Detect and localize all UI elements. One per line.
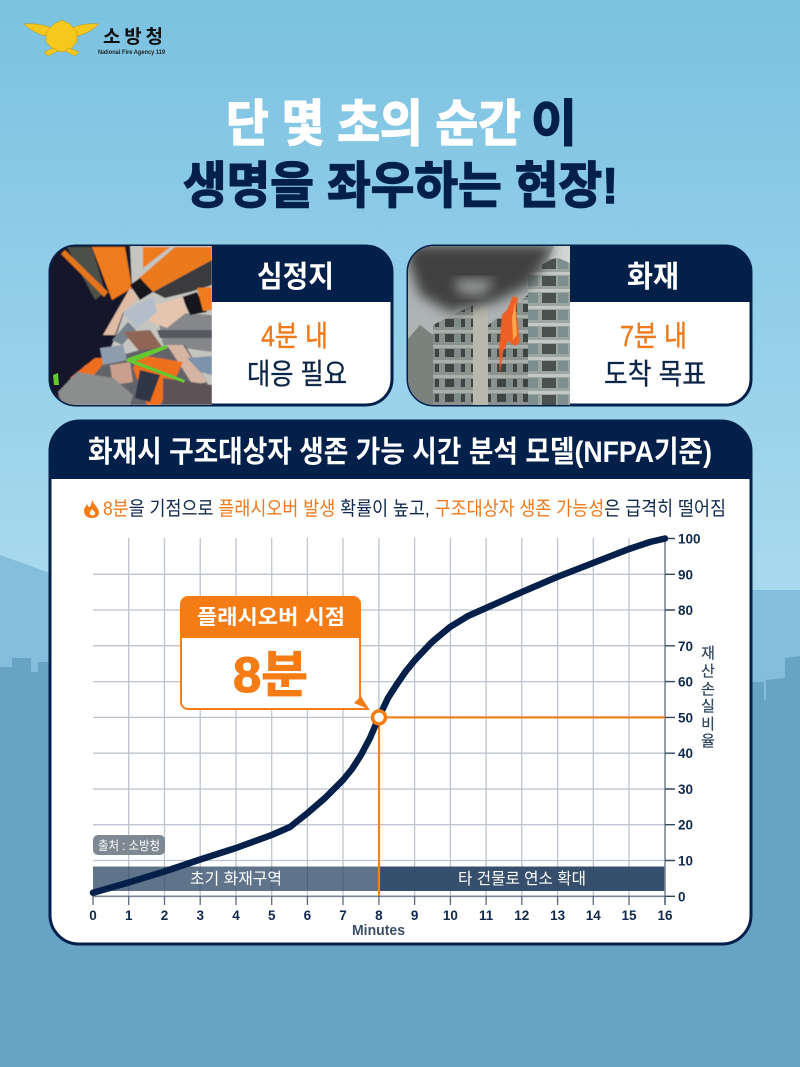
x axis labels: 6 bbox=[304, 908, 312, 923]
title: 생명을 좌우하는 현장! bbox=[183, 158, 618, 214]
y axis labels: 100 bbox=[678, 532, 701, 546]
x axis labels: 4 bbox=[232, 908, 240, 923]
source tag bbox=[93, 835, 165, 855]
logo: National Fire Agency bbox=[24, 20, 166, 56]
x axis labels: 1 bbox=[125, 908, 133, 923]
title: 이 bbox=[531, 96, 577, 152]
y axis title: 재 bbox=[701, 645, 715, 662]
x axis labels: 8 bbox=[375, 908, 383, 923]
y axis labels: 0 bbox=[678, 889, 686, 904]
y axis labels: 50 bbox=[678, 710, 693, 725]
marker point bbox=[372, 711, 386, 724]
y axis title bbox=[701, 645, 715, 750]
x axis labels: 9 bbox=[411, 908, 418, 923]
text: arrival target: 도착 목표 bbox=[604, 358, 706, 391]
title bbox=[183, 96, 618, 214]
text: response needed: 대응 필요 bbox=[247, 358, 347, 391]
band: spread to other buildings bbox=[379, 866, 665, 891]
logo: National Fire Agency: 소방청 bbox=[103, 26, 163, 48]
x axis labels: 15 bbox=[621, 908, 637, 923]
logo: National Fire Agency: National Fire Agency 119 bbox=[98, 50, 166, 56]
x axis title: Minutes bbox=[352, 923, 405, 939]
text: chart summary: 8분을 기점으로 플래시오버 발생 확률이 높고, 구조대상자 생존 가능성은 급격히 떨어짐 bbox=[103, 498, 726, 520]
x axis labels: 3 bbox=[196, 908, 204, 923]
photo: rescuers treating a patient bbox=[49, 245, 212, 407]
panel: cardiac arrest bbox=[49, 245, 392, 407]
loss curve bbox=[93, 538, 665, 893]
callout: flashover point 8 minutes: 8분 bbox=[233, 647, 308, 703]
y axis labels: 80 bbox=[678, 603, 693, 618]
x axis labels: 2 bbox=[161, 908, 168, 923]
y axis labels: 30 bbox=[678, 782, 693, 797]
y axis title: 비 bbox=[701, 716, 715, 733]
band: initial fire zone bbox=[93, 866, 379, 891]
y axis title: 율 bbox=[701, 733, 715, 750]
x axis labels: 13 bbox=[550, 908, 566, 923]
panel: survival time analysis model bbox=[50, 421, 751, 944]
x axis labels: 0 bbox=[89, 908, 97, 923]
band: spread to other buildings: 타 건물로 연소 확대 bbox=[458, 870, 586, 888]
y axis title: 산 bbox=[701, 663, 715, 680]
x axis labels: 16 bbox=[657, 908, 673, 923]
y axis labels: 10 bbox=[678, 854, 693, 868]
x axis labels bbox=[89, 908, 673, 923]
x axis labels: 10 bbox=[443, 908, 458, 923]
chart: property loss ratio over minutes bbox=[89, 532, 715, 939]
x axis labels: 11 bbox=[479, 908, 494, 923]
x axis labels: 5 bbox=[268, 908, 276, 923]
x axis labels: 14 bbox=[586, 908, 601, 923]
marker lines at 8 minutes bbox=[379, 717, 665, 896]
icon: gold eagle emblem bbox=[24, 20, 99, 56]
y axis labels: 90 bbox=[678, 567, 693, 582]
heading: 화재시 구조대상자 생존 가능 시간 분석 모델(NFPA기준) bbox=[88, 436, 712, 469]
band: initial fire zone: 초기 화재구역 bbox=[190, 870, 282, 888]
y axis title: 실 bbox=[701, 698, 715, 715]
y axis labels: 40 bbox=[678, 746, 693, 761]
text: within 4 minutes: 4분 내 bbox=[261, 321, 328, 353]
text: within 7 minutes: 7분 내 bbox=[620, 321, 687, 353]
y axis title: 손 bbox=[701, 681, 715, 698]
source tag: 출처 : 소방청 bbox=[98, 839, 160, 853]
y axis labels bbox=[678, 532, 701, 904]
callout: flashover point 8 minutes bbox=[181, 596, 368, 709]
y axis labels: 20 bbox=[678, 818, 693, 833]
heading: 화재 bbox=[627, 261, 679, 294]
heading: 심정지 bbox=[257, 261, 334, 294]
panel: fire bbox=[407, 245, 751, 407]
title: 단 몇 초의 순간 bbox=[226, 96, 521, 152]
icon: flame bbox=[84, 499, 99, 518]
callout: flashover point 8 minutes: 플래시오버 시점 bbox=[197, 606, 345, 629]
x axis labels: 7 bbox=[339, 908, 347, 923]
y axis labels: 70 bbox=[678, 639, 693, 654]
photo: burning apartment tower bbox=[407, 245, 570, 407]
axes and ticks bbox=[93, 538, 675, 905]
x axis labels: 12 bbox=[514, 908, 529, 923]
y axis labels: 60 bbox=[678, 675, 693, 690]
